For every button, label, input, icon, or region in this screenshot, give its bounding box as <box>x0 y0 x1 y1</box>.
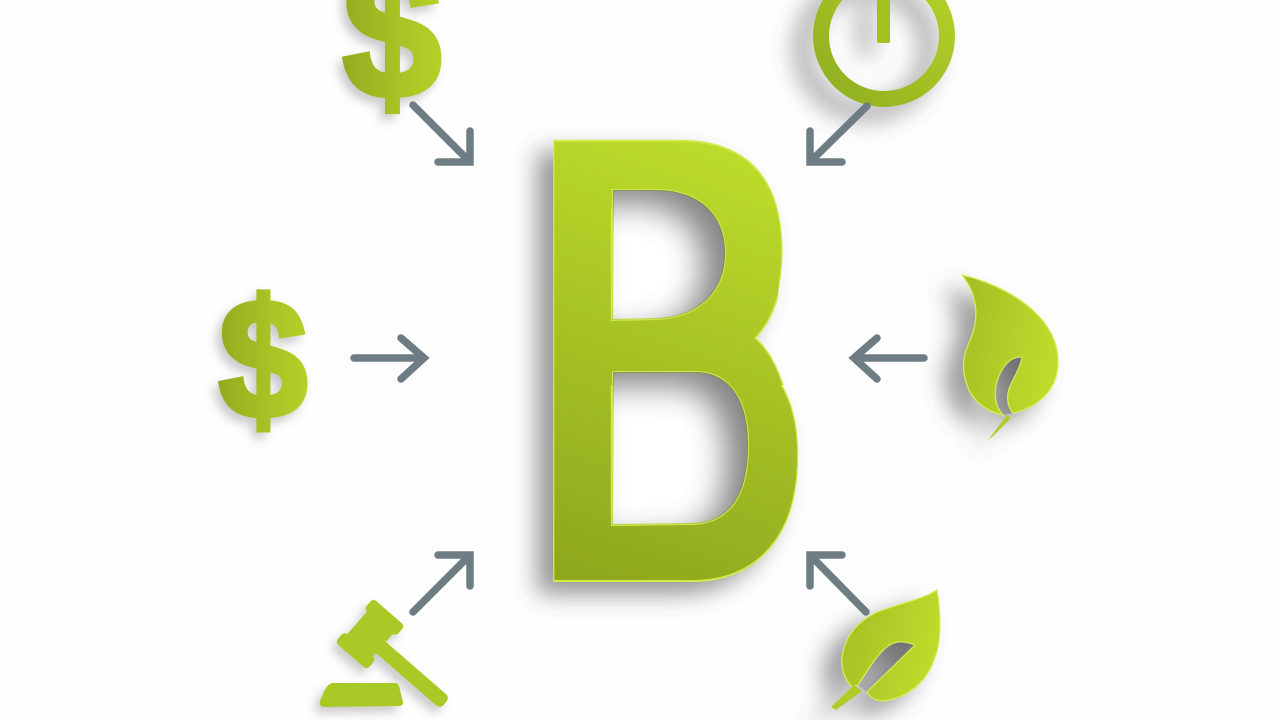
icon: gavel <box>320 598 466 720</box>
gavel base <box>320 683 403 707</box>
B lower counter with inner shadow <box>611 371 749 526</box>
arrow: clock to B <box>810 106 867 162</box>
arrow: left dollar to B <box>354 338 424 379</box>
B upper counter with inner shadow <box>611 189 726 321</box>
large letter B <box>521 136 798 610</box>
large letter B: B <box>527 3 816 718</box>
arrow: bottom leaf to B <box>810 555 866 612</box>
arrow: right leaf to B <box>854 338 924 379</box>
arrow: top left dollar to B <box>413 105 470 162</box>
gavel mallet <box>335 598 466 720</box>
infographic canvas <box>210 0 1059 720</box>
icon: clock <box>821 0 947 99</box>
icon: leaf bottom right <box>831 590 940 710</box>
arrow: gavel to B <box>413 555 470 612</box>
icon: leaf right <box>962 275 1058 440</box>
icon: dollar sign left: $ <box>219 264 307 453</box>
